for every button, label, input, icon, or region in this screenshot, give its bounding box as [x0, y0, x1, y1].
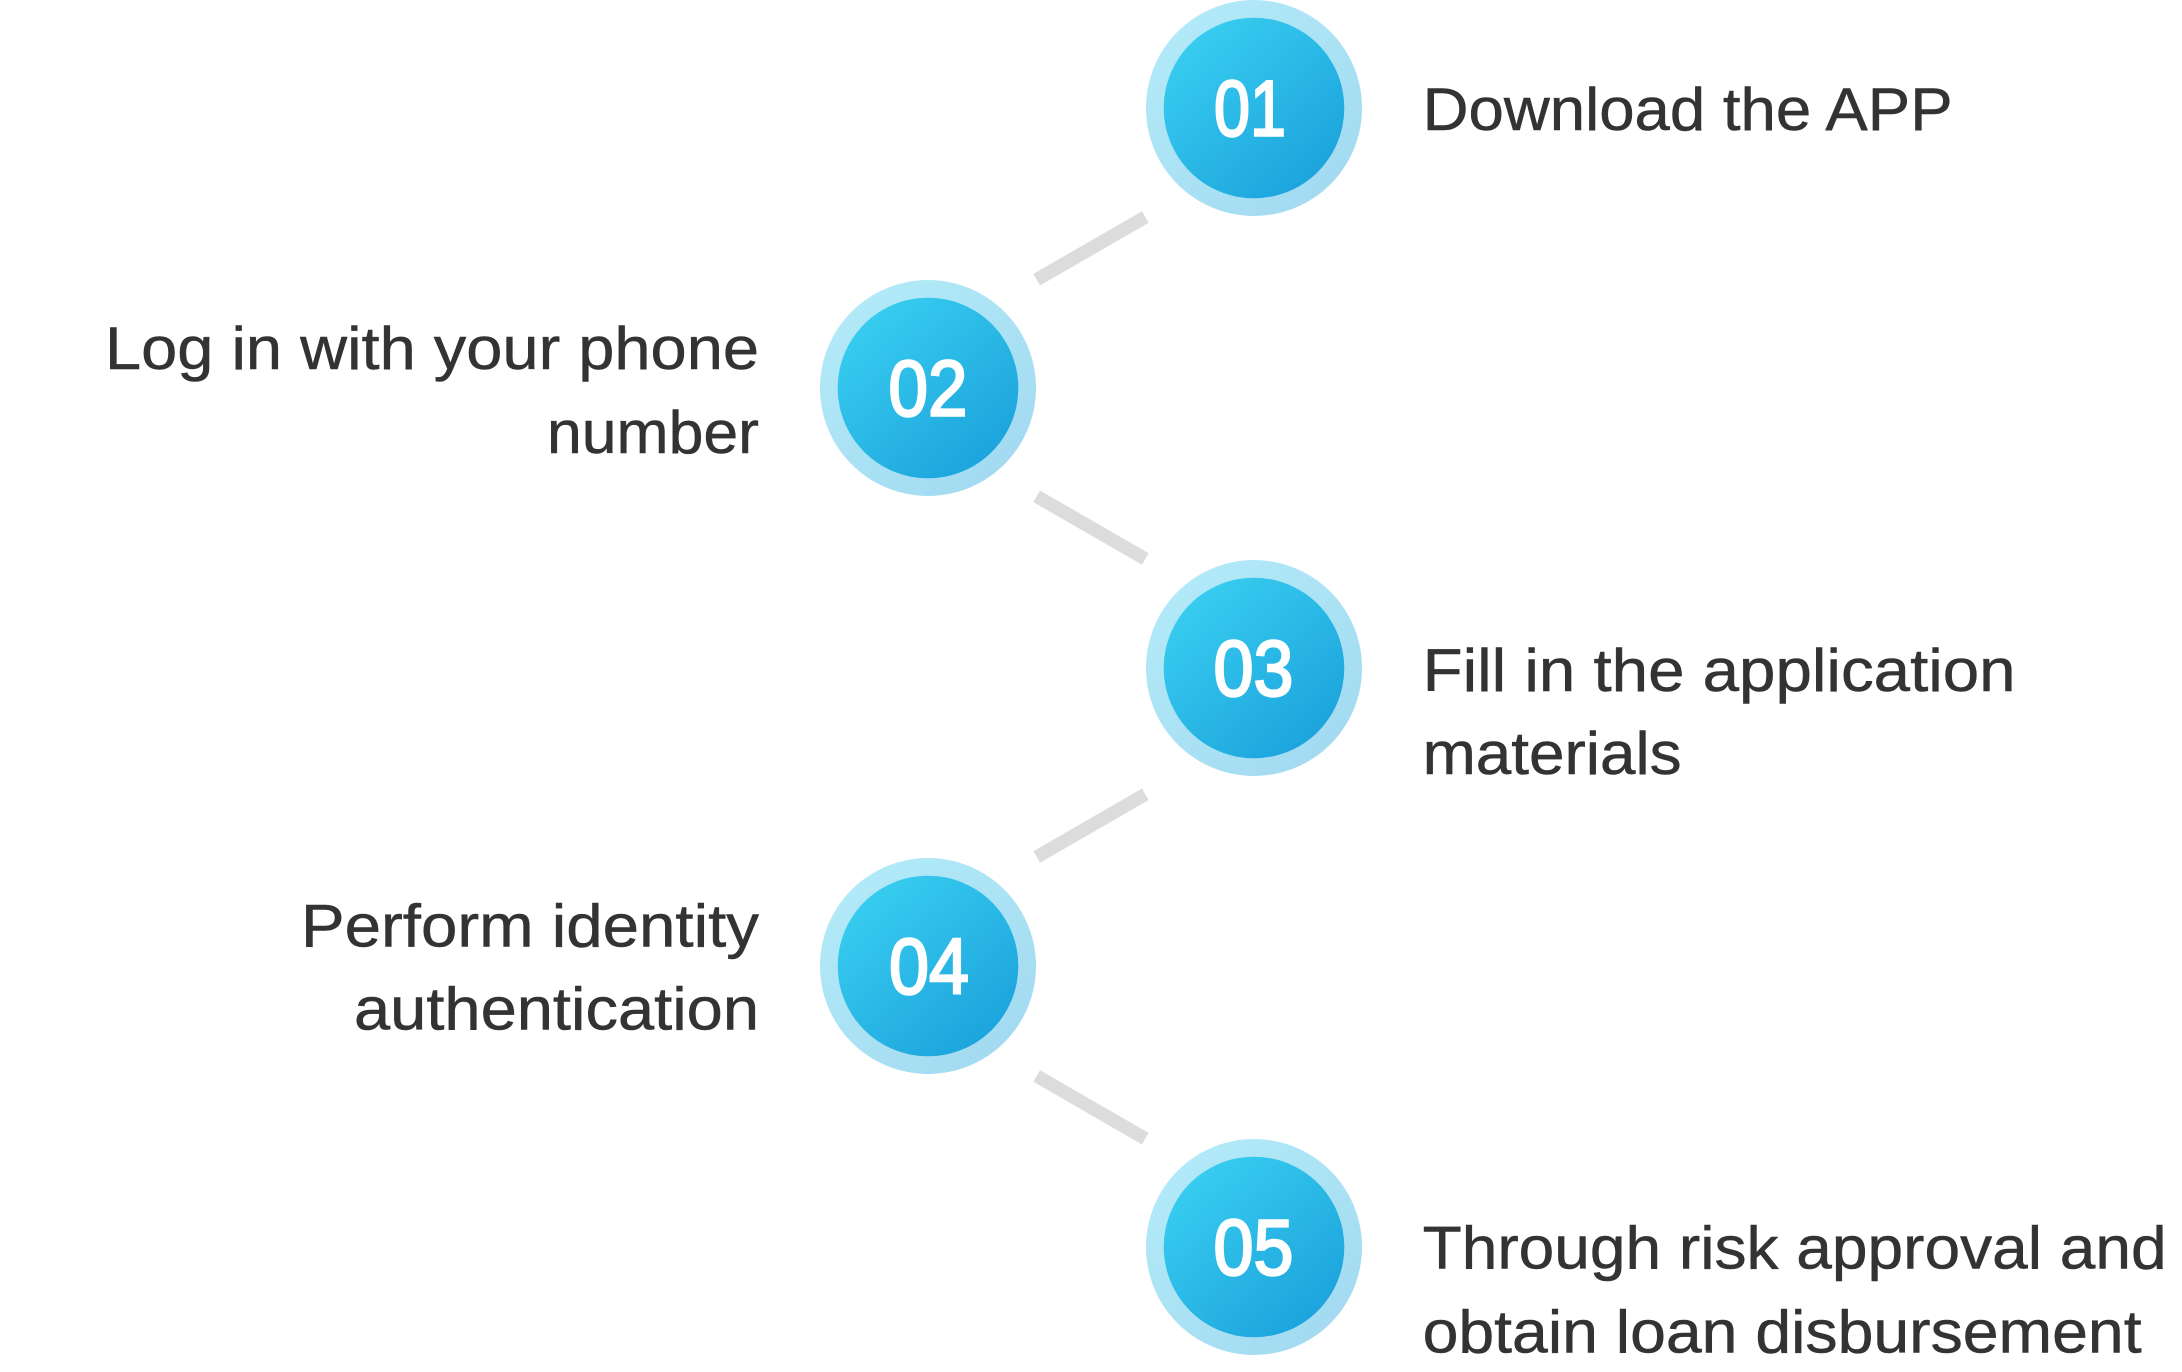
text: step 03 — [1423, 637, 2016, 787]
text: step 04: Perform identity — [301, 892, 759, 960]
text: step 04 — [301, 892, 759, 1042]
badge: step 01 — [1146, 0, 1362, 216]
connector: step 3 to 4 — [1037, 794, 1145, 857]
badge: step 04: 04 — [889, 922, 969, 1010]
badge: step 05: 05 — [1214, 1202, 1294, 1292]
text: step 03: materials — [1423, 720, 1682, 787]
text: step 03: Fill in the application — [1423, 637, 2016, 704]
connector: step 4 to 5 — [1037, 1076, 1145, 1139]
text: step 01: Download the APP — [1423, 76, 1953, 143]
badge: step 05 — [1146, 1139, 1362, 1355]
text: step 05 — [1423, 1214, 2167, 1366]
text: step 02 — [105, 315, 759, 466]
badge: step 02: 02 — [888, 344, 968, 432]
text: step 02: Log in with your phone — [105, 315, 759, 382]
connector: step 1 to 2 — [1037, 217, 1145, 280]
badge: step 04 — [820, 858, 1036, 1074]
text: step 05: obtain loan disbursement — [1423, 1298, 2142, 1366]
badge: step 01: 01 — [1214, 64, 1286, 152]
text: step 04: authentication — [354, 976, 759, 1042]
text: step 05: Through risk approval and — [1423, 1214, 2167, 1282]
badge: step 03: 03 — [1214, 624, 1294, 712]
badge: step 03 — [1146, 560, 1362, 776]
badge: step 02 — [820, 280, 1036, 496]
text: step 02: number — [547, 399, 759, 466]
connector: step 2 to 3 — [1037, 496, 1145, 559]
